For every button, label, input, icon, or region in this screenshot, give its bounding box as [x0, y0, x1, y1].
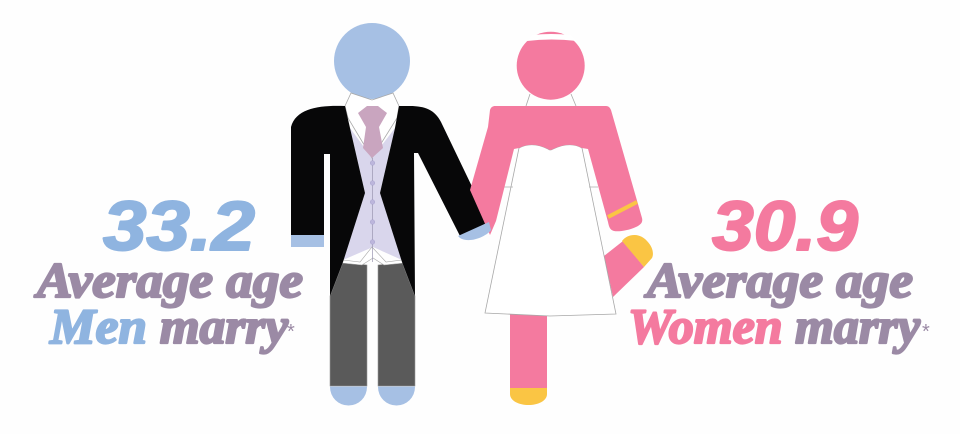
groom shirt — [345, 93, 399, 158]
bride head — [517, 32, 585, 100]
groom trousers — [330, 262, 415, 386]
women asterisk: * — [922, 321, 930, 343]
bride tiara — [527, 34, 577, 41]
groom left cuff — [291, 235, 324, 247]
groom figure — [291, 23, 489, 406]
women marry label: Women marry — [628, 298, 921, 354]
women statistic — [628, 187, 930, 354]
bride standing leg — [510, 310, 547, 388]
women average age number: 30.9 — [712, 187, 858, 265]
waistcoat bottom — [342, 247, 404, 265]
bride jacket and arms — [470, 106, 642, 235]
men statistic — [34, 187, 303, 354]
sleeve hem lines — [503, 186, 598, 188]
groom jacket — [291, 106, 489, 296]
bride dress — [485, 145, 616, 316]
groom right cuff — [458, 222, 491, 240]
bride raised leg — [604, 241, 644, 297]
groom shoes — [330, 386, 415, 406]
bride bracelet — [608, 202, 637, 217]
bride raised shoe — [622, 235, 653, 267]
women average age label: Average age — [644, 252, 913, 308]
waistcoat buttons — [370, 158, 375, 262]
groom head — [334, 23, 410, 99]
men average age number: 33.2 — [103, 187, 255, 265]
bride standing shoe — [510, 388, 547, 405]
men marry label: Men marry — [49, 298, 289, 354]
men asterisk: * — [287, 321, 295, 343]
groom tie — [358, 106, 387, 158]
bride veil lines — [526, 94, 576, 106]
bride figure — [458, 32, 653, 405]
men average age label: Average age — [34, 252, 303, 308]
groom waistcoat — [343, 128, 402, 260]
